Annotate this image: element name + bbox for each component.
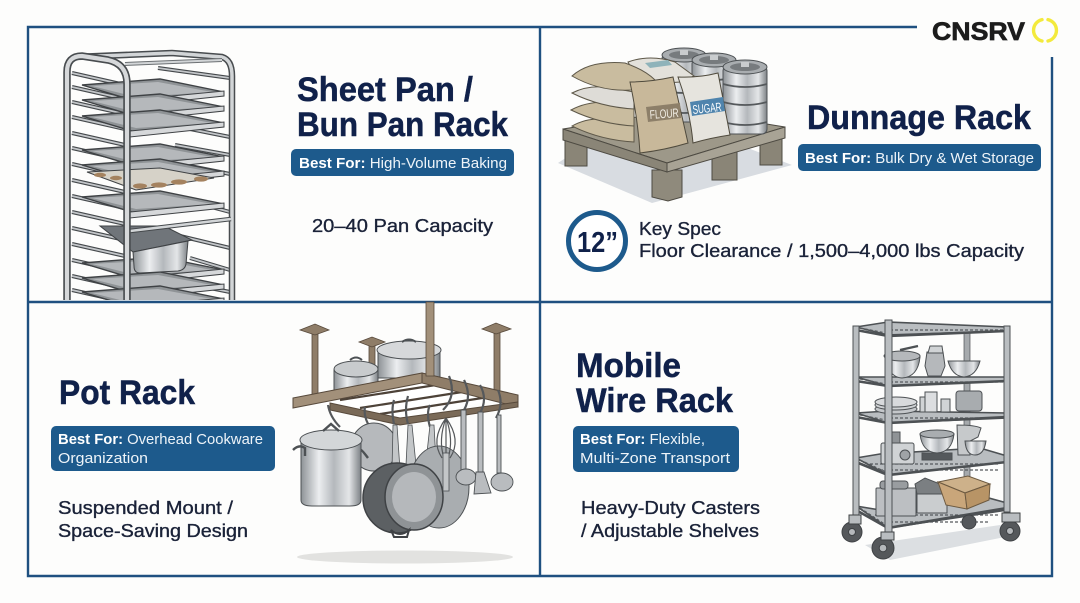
badge: best for — [51, 426, 275, 471]
spec text — [58, 497, 248, 541]
spec text — [581, 497, 760, 541]
label: flour — [646, 103, 681, 122]
sacks — [571, 58, 694, 142]
spec text: Space-Saving Design — [58, 520, 248, 541]
illustration: dunnage rack — [558, 48, 792, 203]
badge: best for — [291, 149, 514, 176]
panel: pot rack — [51, 302, 518, 564]
logo: CNSRV — [932, 18, 1056, 46]
badge: best for: Best For: Overhead Cookware — [58, 431, 263, 448]
pallet top — [563, 110, 785, 163]
heading: Mobile — [576, 347, 681, 385]
illustration: sheet pan rack — [67, 53, 232, 313]
badge: best for: Best For: Bulk Dry & Wet Storage — [805, 150, 1034, 167]
badge: best for — [573, 426, 739, 472]
spec text: Heavy-Duty Casters — [581, 497, 760, 518]
floor shadow — [865, 525, 1015, 560]
pans — [409, 446, 469, 528]
heading: Pot Rack — [59, 374, 195, 412]
spec text: Suspended Mount / — [58, 497, 234, 518]
spec text: 20–40 Pan Capacity — [312, 215, 494, 236]
stock pot — [293, 423, 397, 506]
heading: Sheet Pan / — [297, 71, 474, 109]
shelves — [856, 322, 1007, 528]
back post — [964, 330, 970, 520]
hooks — [328, 376, 501, 429]
heading: Dunnage Rack — [807, 99, 1031, 137]
shelf 4 items — [876, 478, 947, 516]
ceiling rods — [300, 323, 511, 395]
ladles — [456, 410, 513, 494]
panel: dunnage rack — [558, 48, 1041, 270]
badge: best for: Multi-Zone Transport — [580, 450, 731, 467]
pans — [82, 78, 224, 100]
panel: mobile wire rack — [573, 320, 1020, 560]
heading: Bun Pan Rack — [297, 106, 508, 144]
label: sugar: SUGAR — [692, 100, 722, 117]
badge: best for: Best For: Flexible, — [580, 431, 705, 448]
heading — [576, 347, 733, 420]
spec text: / Adjustable Shelves — [581, 520, 759, 541]
logo: CNSRV: CNSRV — [932, 18, 1025, 46]
icon: yellow ring — [1034, 20, 1056, 41]
front shelf rim — [856, 330, 1007, 528]
icon: 12 inch circle — [568, 212, 626, 270]
label: flour: FLOUR — [649, 106, 679, 122]
heading — [297, 71, 508, 144]
key spec text: Floor Clearance / 1,500–4,000 lbs Capacity — [639, 240, 1025, 261]
rack frame — [293, 373, 518, 420]
whisk — [437, 418, 455, 458]
kegs — [662, 48, 706, 122]
illustration: pot rack — [293, 302, 518, 564]
shelf 1 items — [884, 346, 980, 378]
cardboard box — [938, 476, 990, 509]
back frame — [75, 53, 232, 302]
pan handles — [392, 425, 436, 470]
posts — [853, 320, 1010, 538]
top pots — [334, 340, 441, 392]
icon: 12 inch circle: 12” — [577, 227, 618, 259]
shelf 2 items — [875, 391, 982, 414]
shelf 3 items — [881, 425, 986, 464]
key spec text — [639, 218, 1025, 261]
heading: Wire Rack — [576, 382, 733, 420]
shadow — [297, 550, 513, 564]
badge: best for: Best For: High-Volume Baking — [299, 155, 507, 172]
key spec text: Key Spec — [639, 218, 721, 239]
badge: best for: Organization — [58, 450, 148, 467]
badge: best for — [798, 144, 1041, 171]
pallet legs — [565, 138, 587, 166]
hotel pan — [100, 226, 192, 273]
front frame — [67, 56, 127, 304]
label: sugar — [690, 97, 725, 117]
casters — [842, 513, 1020, 559]
illustration: mobile wire rack — [842, 320, 1020, 560]
panel: sheet pan rack — [67, 53, 514, 313]
